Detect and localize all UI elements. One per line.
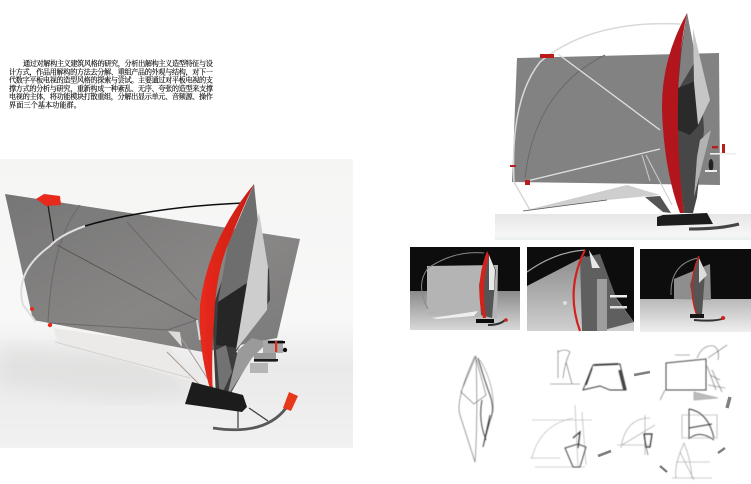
light sails [693, 28, 710, 125]
floor reflection [495, 214, 751, 240]
rear control modules [250, 340, 287, 373]
translucent lower stand plane [53, 328, 207, 390]
text block: project description: 计方式，作品用解构的方法去分解、重组产品的外观与结构，对下一 [9, 67, 213, 77]
sketch: fin front view [459, 356, 493, 462]
arc arm black section [85, 203, 243, 226]
rear dark fin [212, 184, 270, 398]
text block: project description [9, 59, 214, 110]
soft floor shadow [0, 345, 200, 400]
sketch: figure and screen concept [550, 350, 626, 390]
text block: project description: 撑方式的分析与研究，重新构成一种紊乱、无序、夸张的造型来支撑 [9, 84, 214, 94]
text block: project description: 通过对解构主义建筑风格的研究，分析出解构主义造型特征与设 [23, 59, 213, 69]
base arc arm [213, 408, 286, 430]
text block: project description: 界面三个基本功能群。 [9, 100, 81, 110]
screen panel creases [48, 205, 197, 330]
image background [0, 159, 353, 448]
arrow: side view to large view [598, 451, 611, 456]
thin inner arc [525, 55, 605, 178]
red end cap [283, 392, 298, 411]
base [657, 213, 713, 226]
grey screen panel [512, 53, 720, 185]
white arc arm [514, 24, 680, 210]
thumbnail 2 [527, 247, 634, 331]
arrow: concept to screen [634, 372, 650, 375]
light sail [236, 212, 268, 350]
sketch: side view small [617, 415, 655, 455]
arrow: fin to side view [660, 466, 667, 472]
text block: project description: 电视的主体，将功能模块打散重组，分解出显示单元、音频源、操作 [9, 92, 213, 102]
sketch: screen with arc [660, 345, 727, 400]
base arc arm [689, 224, 739, 229]
side render: TV from front [495, 13, 751, 240]
lower wing stand [523, 185, 660, 211]
process arrows [598, 372, 730, 472]
red thin brace [57, 245, 197, 320]
sketches [459, 345, 727, 480]
sketch: side view large [530, 405, 592, 467]
arrow: wireframe to fin [718, 448, 725, 453]
thumbnail 1 [410, 247, 520, 330]
stand struts [55, 333, 213, 388]
dark central fin [676, 13, 704, 213]
text block: project description: 代数字平板电视的造型风格的探索与尝试。主要通过对平板电视的支 [9, 76, 213, 85]
red fin [200, 184, 254, 398]
thumbnail row [410, 247, 751, 332]
base [185, 382, 247, 412]
sketch: fin perspective [672, 443, 712, 480]
rear control modules [705, 144, 736, 172]
arc arm white section [21, 226, 85, 322]
lower grey sail [227, 338, 268, 397]
dark red fin [662, 13, 687, 213]
thumbnail 3 [640, 249, 751, 332]
main render: TV from above [0, 159, 353, 448]
red clips on arc [36, 194, 61, 206]
arrow: screen to wireframe [727, 397, 730, 408]
sketch: arc wireframe [682, 409, 717, 440]
white braces [527, 54, 660, 181]
red clips [510, 54, 554, 185]
grey screen panel [5, 194, 300, 352]
